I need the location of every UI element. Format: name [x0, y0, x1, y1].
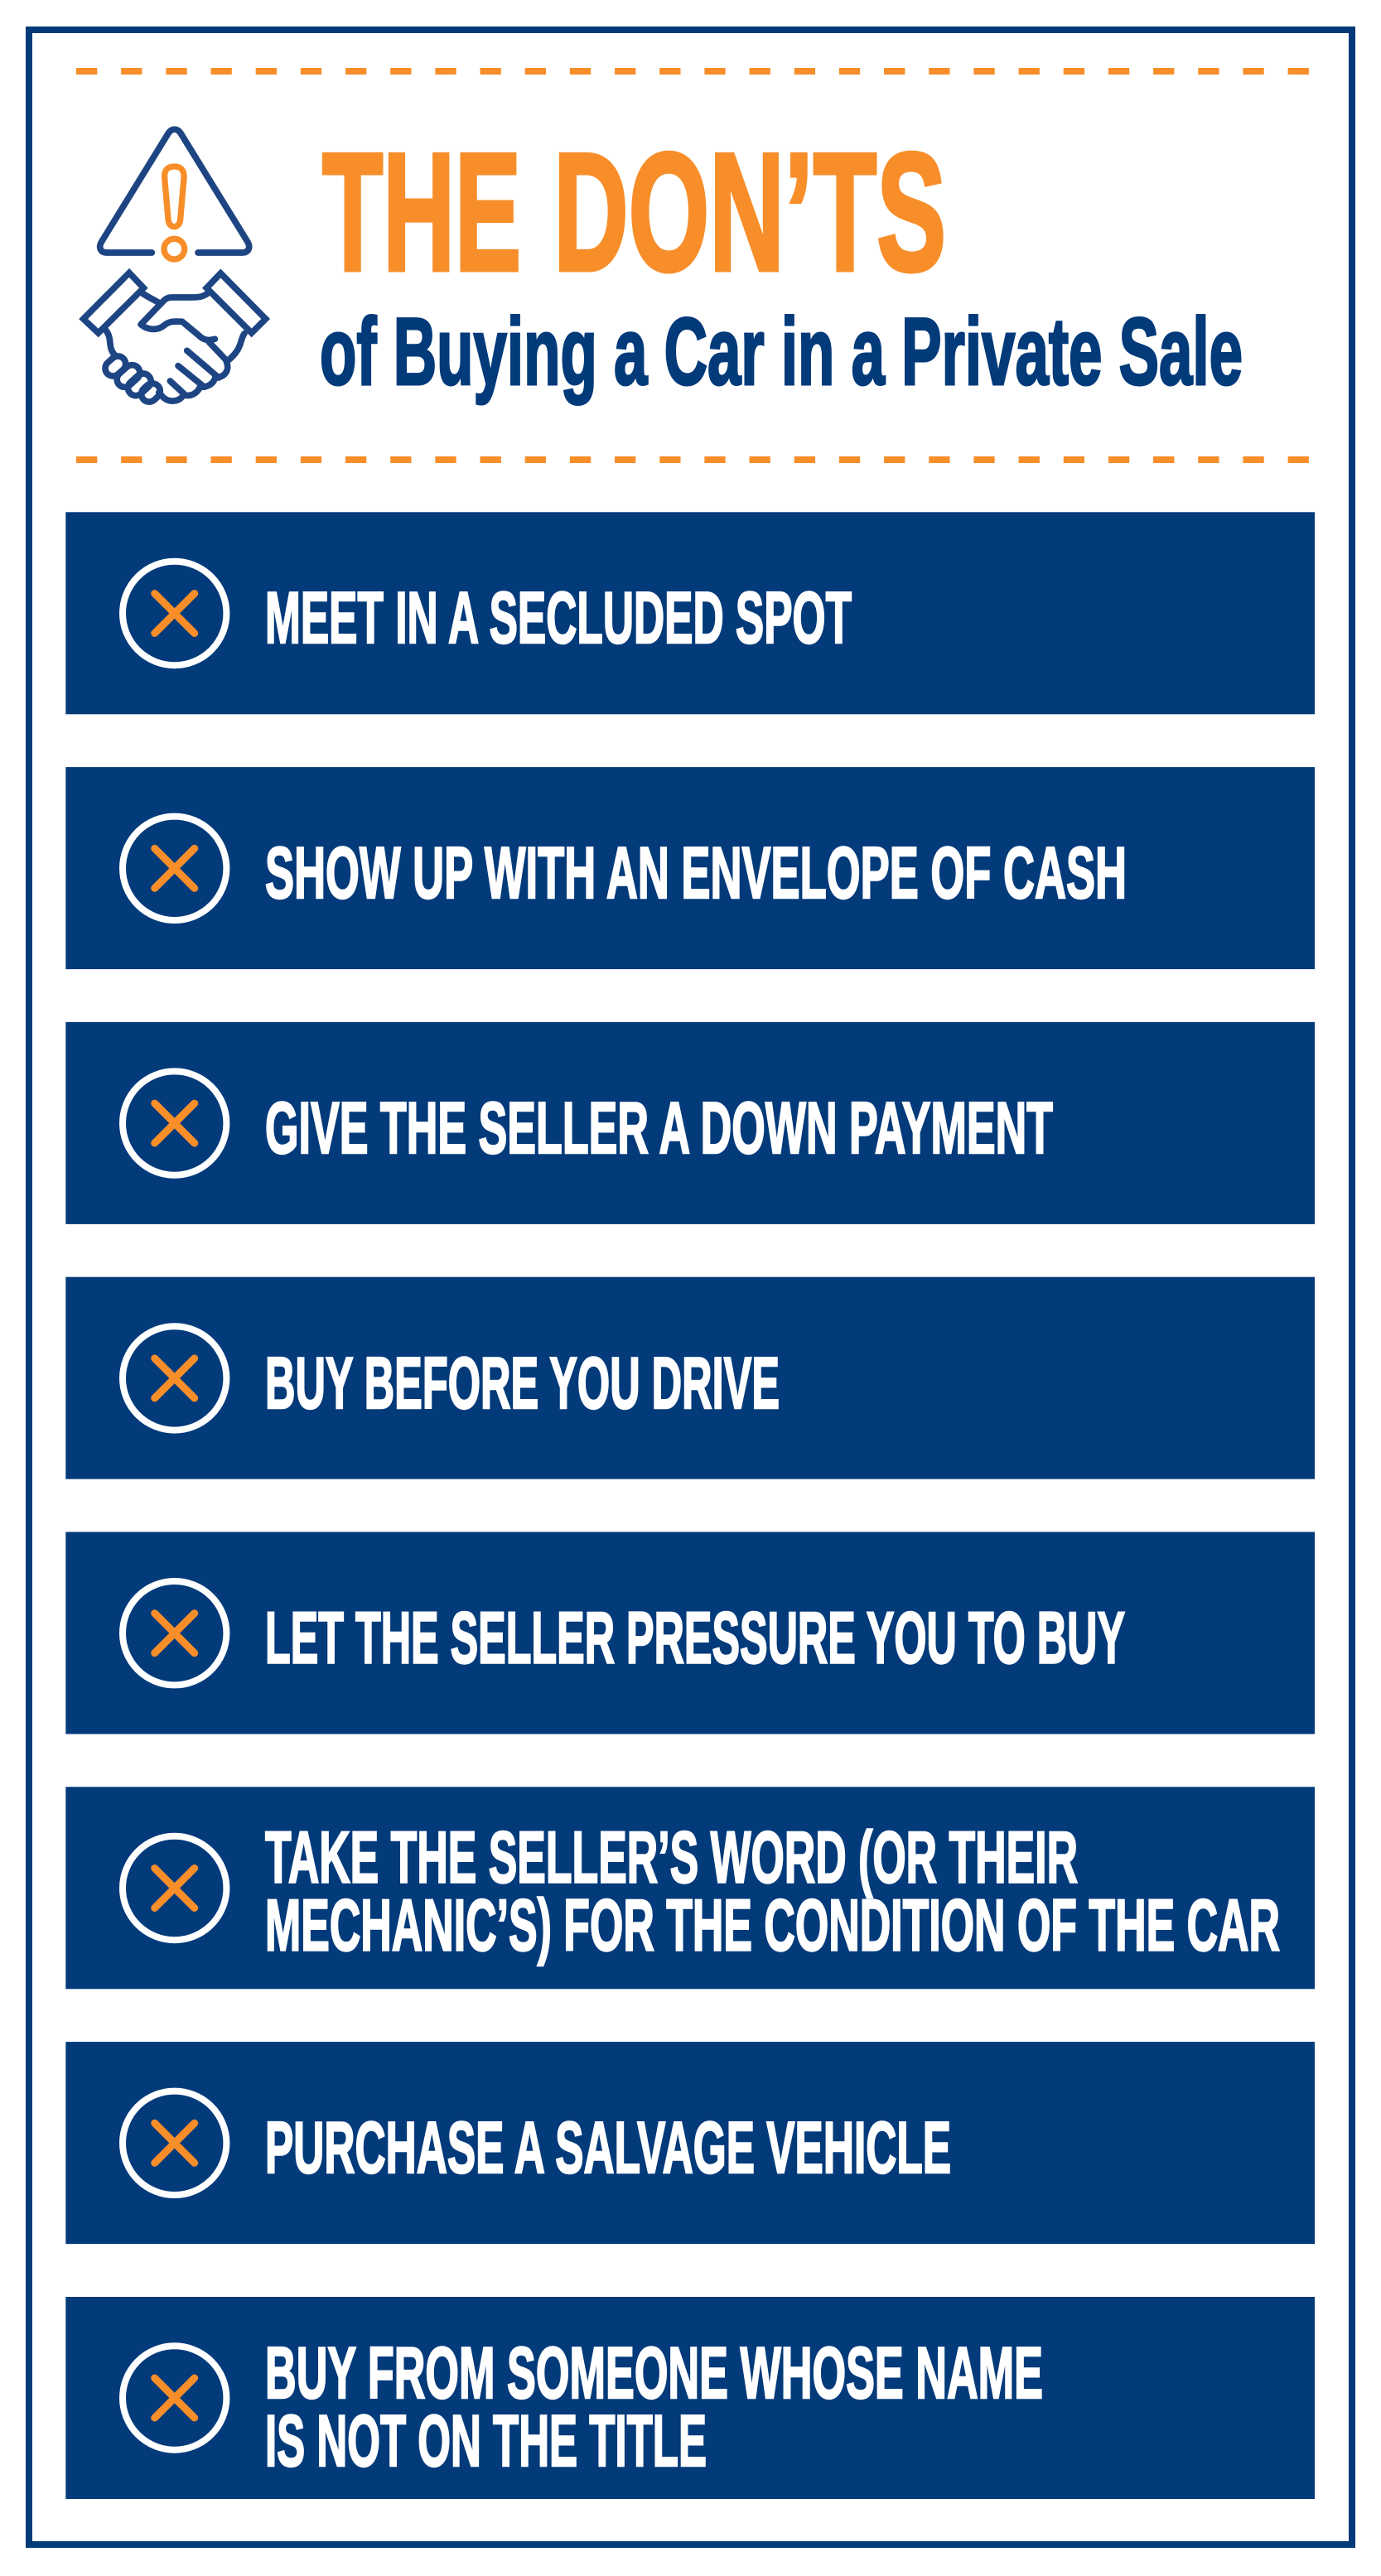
row 8: buy from someone whose name is not on the title [65, 2297, 1315, 2499]
row 4: buy before you drive [65, 1277, 1315, 1479]
x icon [123, 2346, 226, 2450]
x icon [123, 1326, 226, 1430]
row 6: take the seller's word [65, 1787, 1315, 1989]
x icon [123, 562, 226, 665]
row 2: show up with an envelope of cash [65, 767, 1315, 969]
top dashed rule [76, 68, 1313, 75]
bottom dashed rule [76, 456, 1313, 463]
row 1 text: MEET IN A SECLUDED SPOT [265, 576, 852, 658]
row 3: give the seller a down payment [65, 1022, 1315, 1224]
title [322, 118, 946, 306]
x icon [123, 817, 226, 920]
row 8 text: IS NOT ON THE TITLE [265, 2400, 707, 2482]
x icon [123, 1071, 226, 1175]
warning triangle [100, 129, 249, 253]
x icon [123, 1581, 226, 1685]
header icon: warning triangle and handshake [84, 129, 266, 405]
row 4 text: BUY BEFORE YOU DRIVE [265, 1342, 780, 1424]
row 7: purchase a salvage vehicle [65, 2042, 1315, 2244]
row 8 text [265, 2332, 1043, 2482]
title: THE [322, 118, 521, 306]
exclamation mark [164, 166, 185, 259]
row 5: let the seller pressure you to buy [65, 1532, 1315, 1734]
row 6 text [265, 1816, 1280, 1966]
row 1: meet in a secluded spot [65, 512, 1315, 714]
x icon [123, 1836, 226, 1940]
handshake [84, 273, 266, 405]
x icon [123, 2091, 226, 2195]
title: DON’TS [553, 118, 946, 306]
